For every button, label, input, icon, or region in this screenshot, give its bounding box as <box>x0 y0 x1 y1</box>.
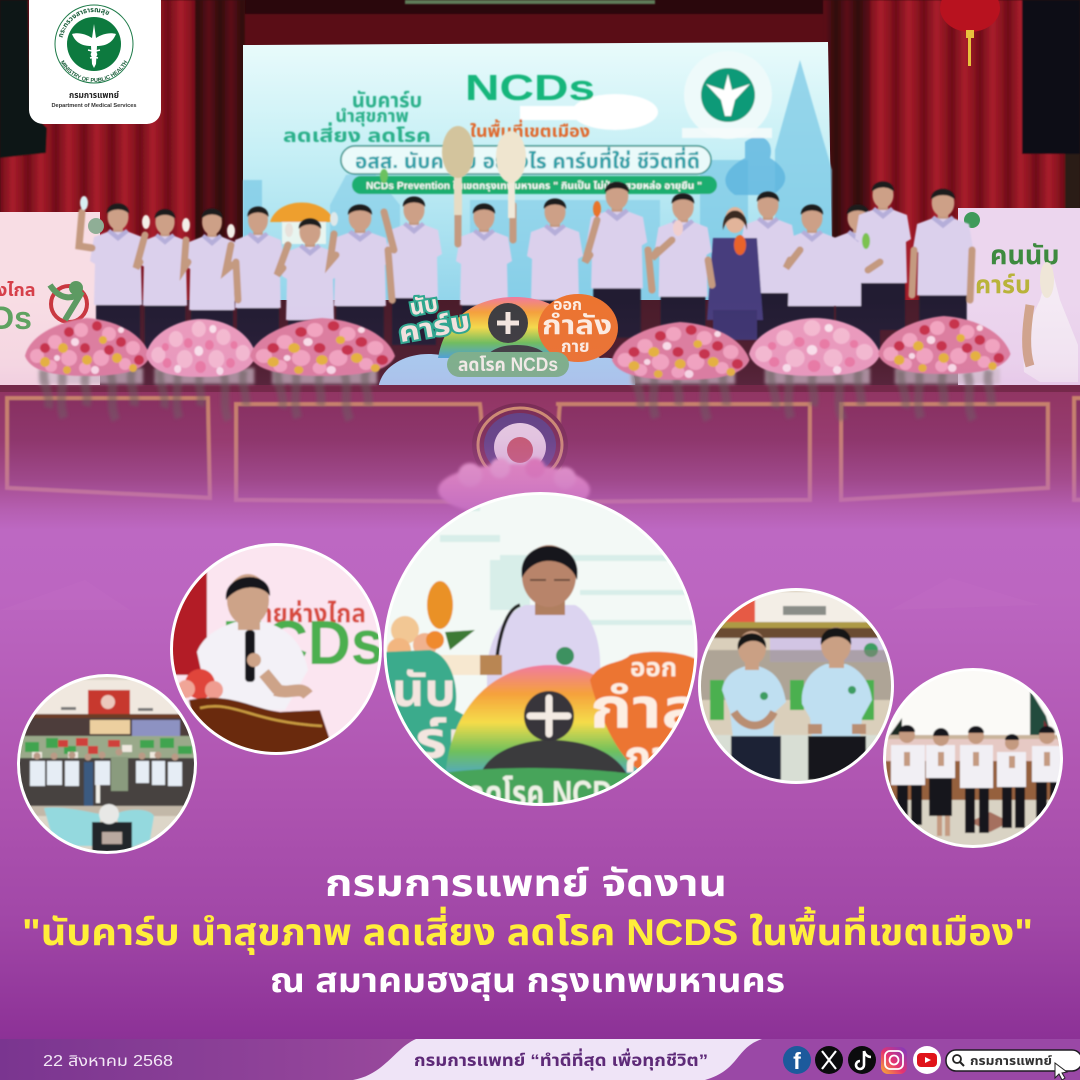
flowers <box>427 581 453 629</box>
icon: TikTok <box>848 1046 876 1074</box>
screen logo <box>684 51 772 139</box>
faint background peaks <box>0 578 1040 610</box>
logo card: Department of Medical Services <box>52 103 136 109</box>
slogan: กรมการแพทย์ “ทำดีที่สุด เพื่อทุกชีวิต” <box>414 1048 708 1071</box>
flower heads <box>25 316 1010 380</box>
slogan ribbon <box>353 1039 762 1080</box>
projection screen <box>243 42 833 310</box>
photo circle 2: speaker at lectern: ายห่างไกล <box>262 598 366 628</box>
photo: stage ceremony <box>0 0 1080 530</box>
bottom green band <box>448 767 632 803</box>
orange right sign <box>590 652 698 780</box>
logo card <box>29 0 161 124</box>
center podium sign: ออก <box>553 297 582 314</box>
icon: facebook <box>783 1046 811 1074</box>
crest <box>472 403 568 487</box>
five people <box>897 776 1061 833</box>
projection screen: NCDs <box>465 67 595 108</box>
photo circle 3: main speaker with sign: ลดโรค NCDs <box>468 773 628 814</box>
search box: กรมการแพทย์ <box>970 1054 1052 1068</box>
center podium sign: ลดโรค NCDs <box>458 355 558 376</box>
left banner <box>0 212 104 387</box>
speaker <box>487 605 600 690</box>
pink flowers below crest <box>438 458 590 516</box>
right banner: คาร์บ <box>975 271 1031 299</box>
right banner <box>958 208 1080 386</box>
photo circle 3: main speaker with sign: กา <box>624 733 671 782</box>
front row <box>30 761 182 786</box>
projection screen: อสส. นับคาร์บ อย่างไร คาร์บที่ใช่ ชีวิตที่ดี <box>355 147 700 173</box>
backdrop behind people <box>100 300 958 385</box>
guest 1 <box>722 666 786 738</box>
people holding rice spoons <box>79 126 973 367</box>
center podium sign: นับ <box>408 291 440 320</box>
small spoons <box>80 196 88 210</box>
center podium sign: คาร์บ <box>396 306 472 348</box>
date: 22 สิงหาคม 2568 <box>43 1053 173 1070</box>
curtains <box>0 0 1080 320</box>
white rice spoon graphic <box>572 94 658 130</box>
right banner: คนนับ <box>990 240 1059 270</box>
skyline <box>243 60 832 300</box>
flower arrangements <box>38 368 1000 420</box>
photo circle 3: main speaker with sign <box>384 492 702 814</box>
arms <box>79 205 972 300</box>
screen headline text: นับคาร์บ <box>352 90 422 112</box>
headline: "นับคาร์บ นำสุขภาพ ลดเสี่ยง ลดโรค NCDS ในพื้นที่เขตเมือง" <box>22 906 1033 955</box>
big spoons <box>454 175 462 215</box>
lantern <box>940 0 1000 66</box>
headline: ณ สมาคมฮงสุน กรุงเทพมหานคร <box>270 962 785 1001</box>
center podium sign: กาย <box>561 337 590 356</box>
center podium sign <box>378 291 635 390</box>
photo circle 3: main speaker with sign: กำล <box>590 677 702 740</box>
photo circle 1: group photo <box>17 674 197 854</box>
center podium sign: กำลัง <box>542 310 612 340</box>
stage wall <box>0 385 1080 530</box>
photo circle 5: wai greeting <box>883 668 1063 850</box>
photo circle 3: main speaker with sign: นับ <box>392 664 456 716</box>
projection screen: นำสุขภาพ <box>335 106 409 127</box>
icon: cursor <box>1055 1063 1067 1080</box>
headline: กรมการแพทย์ จัดงาน <box>325 863 727 904</box>
projection screen: ในพื้นที่เขตเมือง <box>470 119 590 141</box>
projection screen: NCDs Prevention ในเขตกรุงเทพมหานคร " กินเป็น ไม่ป่วย สวยหล่อ อายุยืน " <box>366 179 702 192</box>
icon: facebook: f <box>793 1048 801 1074</box>
green left sign <box>386 649 464 771</box>
rainbow <box>446 664 638 775</box>
footer bar <box>0 1039 1080 1080</box>
icon: X <box>815 1046 843 1074</box>
logo card: กรมการแพทย์ <box>69 90 119 100</box>
icon: YouTube <box>913 1046 941 1074</box>
projection screen: ลดเสี่ยง ลดโรค <box>283 122 431 147</box>
icon: Instagram <box>881 1047 907 1074</box>
purple fade over photo <box>0 300 1080 530</box>
woman in navy suit <box>707 207 763 340</box>
headline <box>22 863 1033 1001</box>
photo circle 2: speaker at lectern <box>170 543 384 756</box>
photo circle 2: speaker at lectern: NCDs <box>222 609 384 678</box>
ministry seal: กระทรวงสาธารณสุข <box>59 8 110 38</box>
photo circle 3: main speaker with sign: ออก <box>630 652 677 682</box>
photo circle 3: main speaker with sign: าร์บ <box>388 712 486 770</box>
guest 2 <box>802 664 872 738</box>
search box <box>946 1050 1080 1071</box>
photo circle 4: seated guests <box>698 588 894 785</box>
ministry seal: MINISTRY OF PUBLIC HEALTH <box>60 60 128 82</box>
ministry seal <box>54 4 134 84</box>
